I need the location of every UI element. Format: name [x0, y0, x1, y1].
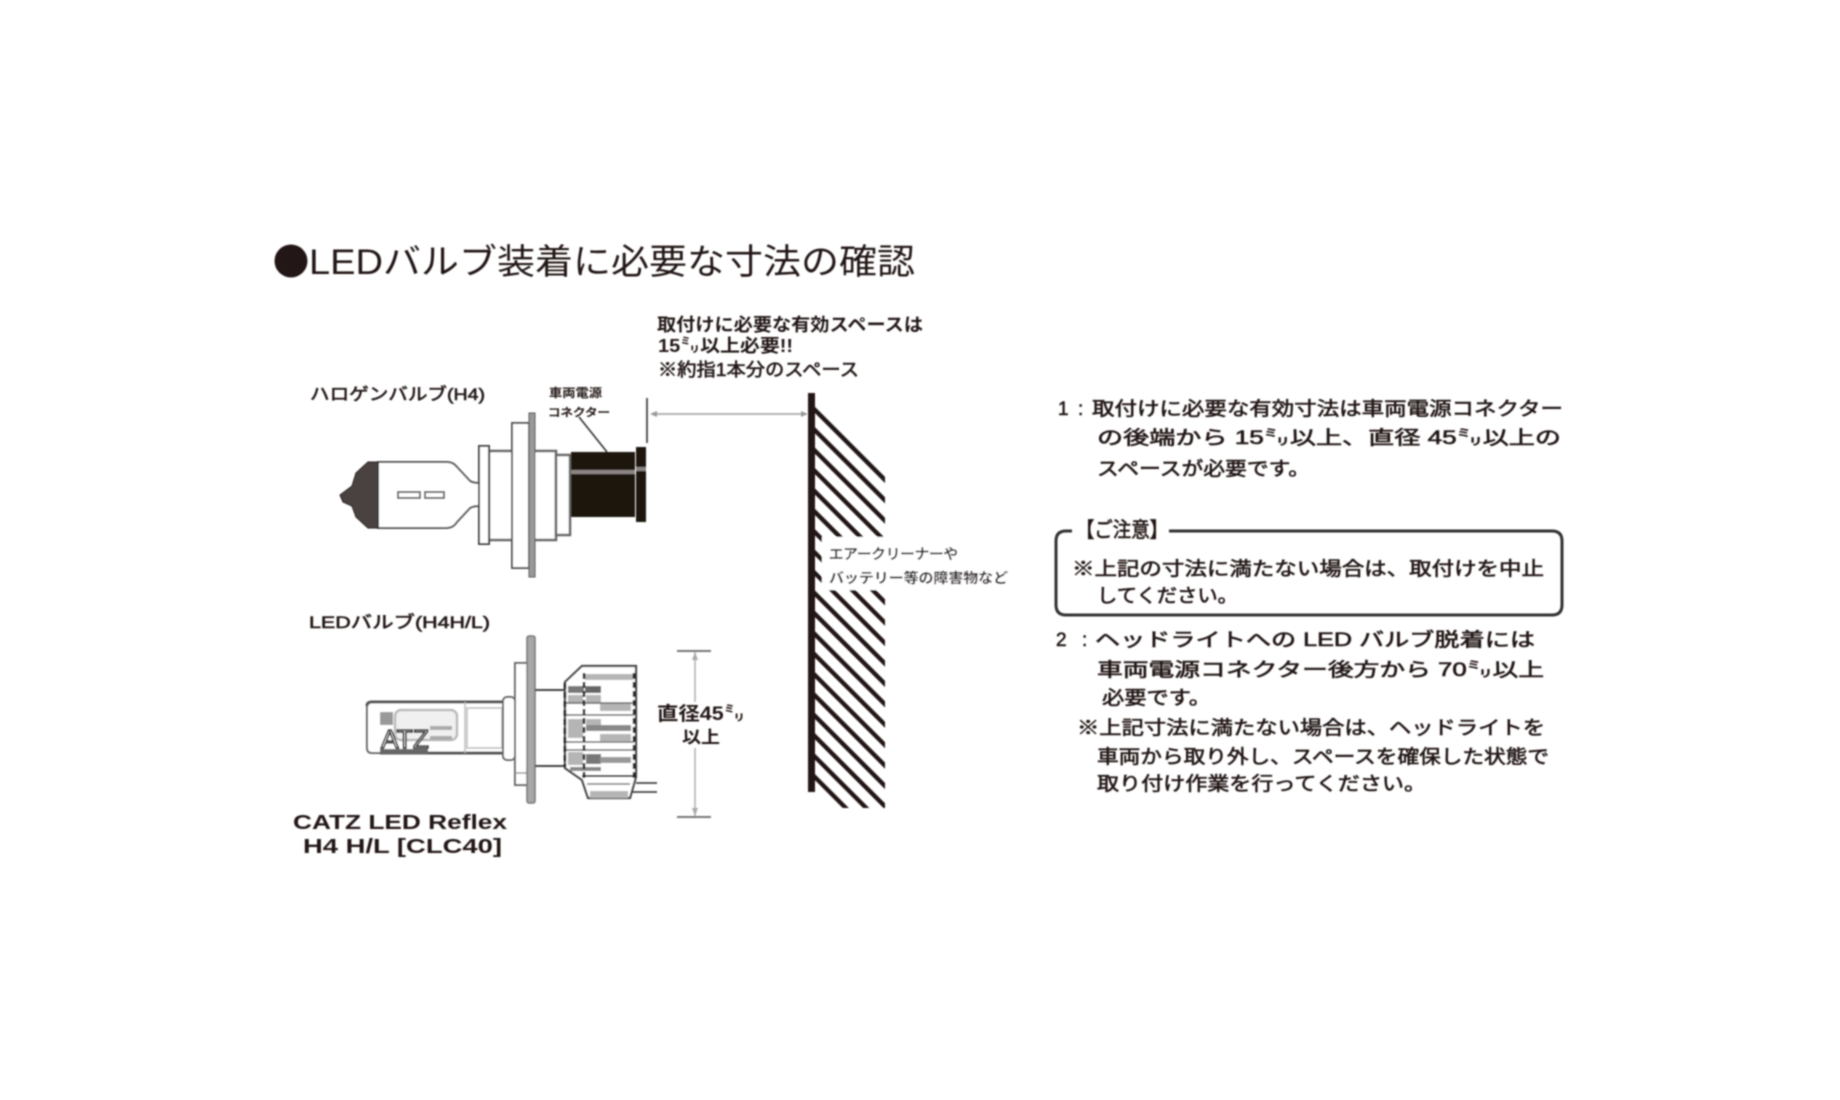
flange: [512, 423, 529, 568]
label: air cleaner / battery obstacles: バッテリー等の障害物など: [829, 570, 1008, 586]
collar: [503, 697, 515, 760]
note 2: 車両電源コネクター後方から 70㍉以上: [1097, 659, 1544, 681]
caution box: [1056, 519, 1562, 615]
callout: required effective space: 取付けに必要な有効スペースは: [657, 315, 923, 335]
note 2: 車両から取り外し、スペースを確保した状態で: [1097, 746, 1549, 768]
label: vehicle power connector: コネクター: [548, 406, 610, 419]
note 1: :: [1078, 399, 1083, 420]
note 2: 取り付け作業を行ってください。: [1097, 773, 1426, 795]
note 2: ※上記寸法に満たない場合は、ヘッドライトを: [1077, 717, 1545, 739]
wires: [632, 783, 657, 792]
connector end: [636, 447, 646, 522]
LED body: [367, 702, 503, 753]
heat sink: [565, 666, 636, 798]
dimension: 45mm diameter: 直径45㍉: [657, 703, 745, 725]
dimension: 15mm gap: [647, 398, 808, 443]
wall with hatching: [808, 393, 1012, 852]
thin plate: [527, 636, 535, 803]
callout: required effective space: [657, 315, 923, 380]
dimension: 45mm diameter: 以上: [682, 728, 720, 747]
diagram: LED bulb H4H/L: [367, 636, 657, 803]
note 1: 取付けに必要な有効寸法は車両電源コネクター: [1092, 398, 1563, 420]
note 1: 1: [1058, 399, 1069, 420]
diagram: halogen bulb H4: [340, 413, 646, 577]
label: air cleaner / battery obstacles: エアークリーナーや: [829, 546, 958, 562]
caution heading: 【ご注意】: [1076, 519, 1168, 542]
thin plate: [529, 413, 535, 577]
label gap over hatch: [822, 537, 1012, 590]
bulb dark tip: [340, 462, 378, 528]
collar: [479, 446, 489, 544]
note 2: :: [1082, 630, 1087, 651]
note 1: スペースが必要です。: [1097, 458, 1310, 480]
title: LEDバルブ装着に必要な寸法の確認: [309, 243, 915, 282]
note 1: の後端から 15㍉以上、直径 45㍉以上の: [1097, 427, 1561, 449]
caution text: ※上記の寸法に満たない場合は、取付けを中止: [1072, 558, 1544, 580]
note 2: 2: [1056, 630, 1067, 651]
base cylinder: [489, 451, 570, 540]
flange: [515, 663, 528, 785]
label: vehicle power connector: [548, 385, 610, 452]
CATZ logo: ATZ: [381, 724, 429, 754]
product name: [293, 812, 507, 858]
bulb glass: [378, 462, 479, 528]
label: halogen bulb: ハロゲンバルブ(H4): [310, 384, 485, 404]
label: LED bulb: LEDバルブ(H4H/L): [309, 612, 490, 632]
note 2: ヘッドライトへの LED バルブ脱着には: [1095, 628, 1535, 651]
LED chip stripes: [430, 728, 452, 738]
filaments: [398, 492, 444, 498]
note 2: 必要です。: [1102, 687, 1211, 709]
infographic canvas: [274, 242, 1565, 858]
connecting lines: [535, 690, 565, 766]
product name: H4 H/L [CLC40]: [303, 836, 502, 858]
note 1: [1058, 398, 1563, 480]
connector body: [571, 452, 635, 517]
callout: required effective space: 15㍉以上必要!!: [658, 336, 793, 356]
heat sink dashed lines: [565, 673, 634, 778]
dimension: 45mm diameter: [657, 651, 745, 817]
caution box: してください。: [1097, 586, 1238, 607]
heat sink gray fins: [568, 674, 633, 798]
label: air cleaner / battery obstacles: [829, 546, 1008, 586]
callout: required effective space: ※約指1本分のスペース: [658, 360, 859, 380]
label: vehicle power connector: 車両電源: [549, 385, 602, 400]
product name: CATZ LED Reflex: [293, 812, 507, 834]
note 2: [1056, 628, 1549, 795]
